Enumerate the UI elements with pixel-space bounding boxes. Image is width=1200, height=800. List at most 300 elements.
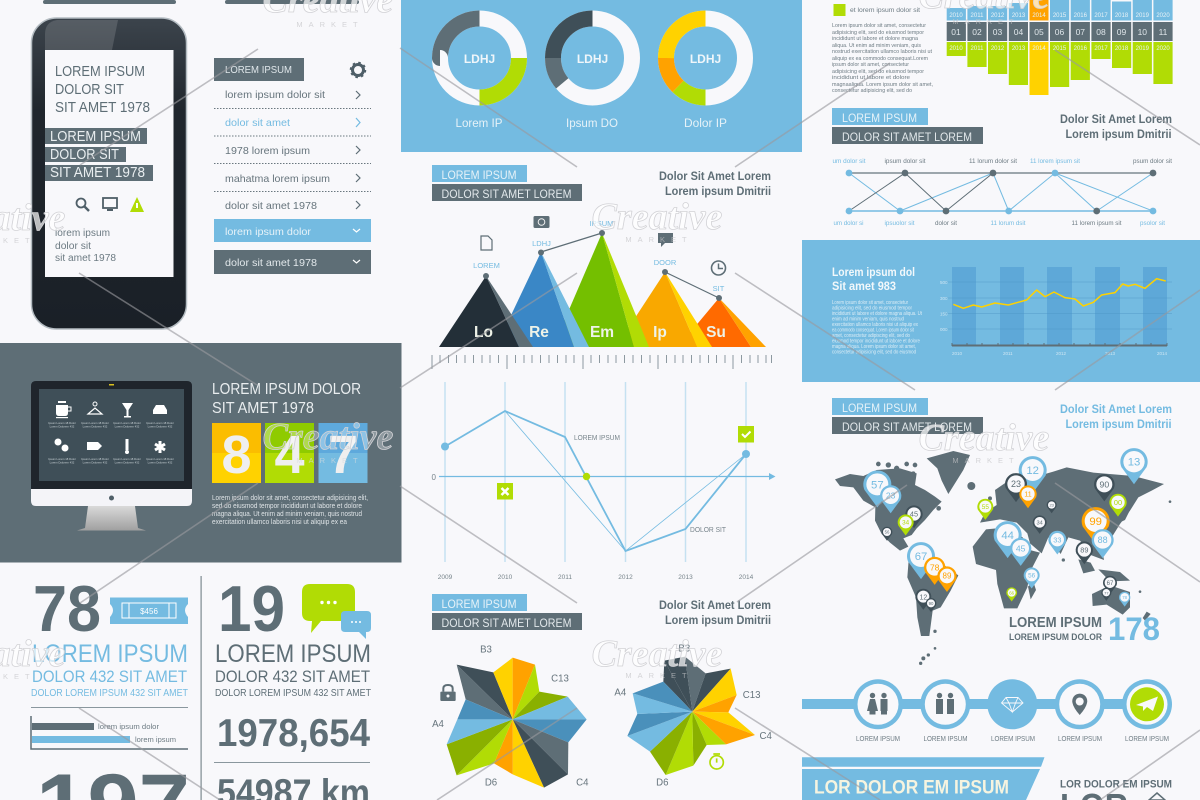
pin 56 (882, 527, 892, 541)
column table chart: 2015 (1053, 13, 1067, 19)
donut 1: LDHJ (464, 52, 495, 66)
pin 77 (1101, 588, 1111, 601)
mountain chart: Ip (653, 324, 667, 341)
panel heading: LOREM IPSUM DOLOR (212, 381, 361, 398)
heading right: mountain chart: Lorem ipsum Dmitrii (665, 184, 771, 198)
pin 13 (1120, 448, 1148, 484)
mountain chart: IPSUM (590, 219, 613, 228)
number tiles (212, 423, 368, 485)
star chart right: C13 (743, 690, 761, 701)
column table chart: 2012 (991, 46, 1005, 52)
icon: speech bubbles (302, 584, 371, 639)
panel paragraph (212, 495, 368, 526)
phone mockup: SIT AMET 1978 (50, 165, 145, 181)
watermark text: MARKET (625, 235, 693, 244)
mountain chart: Lo (474, 324, 493, 341)
panel: blue area chart: ea commodo consequat. Lorem ipsum dolor sit (832, 328, 914, 334)
panel: monitor (0, 343, 402, 562)
star chart right: B3 (678, 644, 690, 655)
column table chart: 2017 (1094, 13, 1108, 19)
monitor icons (54, 401, 167, 454)
star chart left: A4 (432, 719, 445, 730)
pin 33: 33 (1053, 535, 1061, 544)
area chart: 500 (940, 280, 948, 285)
legend and paragraph: adipisicing elit, sed do eiusmod tempor (832, 30, 924, 36)
monitor: Ipsum Lorem 18 Dolor (113, 457, 141, 461)
timeline labels: LOREM IPSUM (991, 736, 1035, 743)
column table chart: 2019 (1136, 13, 1150, 19)
line chart: 2010 (498, 574, 513, 581)
column table chart: 2020 (1156, 13, 1170, 19)
column table chart: 02 (972, 27, 982, 37)
watermark text: MARKET (952, 17, 1020, 26)
donut 1 (440, 18, 519, 98)
icon: diamond (1002, 698, 1023, 712)
panel paragraph: sed do eiusmod tempor incididunt ut labore et dolore (212, 503, 362, 510)
panel: blue area chart: Lorem ipsum dolor sit amet, consectetur (832, 300, 908, 306)
monitor: Ipsum Lorem 18 Dolor (113, 421, 141, 425)
network diagram: psolor sit (1140, 221, 1165, 227)
line chart: DOLOR SIT (690, 525, 726, 534)
pin 55 (977, 499, 993, 520)
mountain chart: Em (590, 324, 614, 341)
stats right column (200, 572, 371, 800)
star chart right: A4 (614, 688, 627, 699)
pin 44 (994, 521, 1022, 558)
heading right: star charts (659, 598, 771, 627)
pin 34 (1033, 515, 1047, 534)
pin 23 (880, 485, 901, 513)
column table chart: 05 (1034, 27, 1044, 37)
menu list: lorem ipsum dolor sit (225, 89, 325, 101)
panel: blue area chart: eiusmod tempor incididunt ut labore et dolore (832, 338, 920, 344)
column table chart: 03 (993, 27, 1002, 37)
heading right: network (1060, 112, 1172, 141)
column table chart: 11 (1159, 27, 1168, 37)
monitor: Lorem Dolorem 432 (148, 424, 173, 428)
icon: cross box (497, 483, 513, 500)
pin 67: 67 (1107, 581, 1114, 587)
pin 78 (1119, 592, 1130, 607)
star chart right: D6 (656, 778, 669, 789)
icon: paper plane (1136, 696, 1158, 711)
column table chart: 2010 (949, 13, 963, 19)
pin 33 (1048, 531, 1066, 555)
mountain chart: LDHJ (532, 239, 551, 248)
pin 56: 56 (1028, 573, 1036, 580)
area chart (940, 267, 1172, 356)
monitor (31, 381, 192, 530)
number tiles: 8 (221, 425, 252, 485)
pin 90: 90 (929, 601, 934, 606)
stats left column: 78 (33, 572, 101, 645)
panel: blue area chart: adipisicing elit, sed do eiusmod tempor (832, 306, 912, 312)
heading right: star charts: Lorem ipsum Dmitrii (665, 613, 771, 627)
legend and paragraph: incididunt ut labore et dolore magna (832, 36, 919, 42)
pin 90 (1094, 474, 1115, 501)
pin 12 (915, 589, 931, 610)
area chart: 2011 (1003, 351, 1013, 356)
icons: document, camera, speech, clock (481, 216, 726, 275)
column table chart: 2014 (1032, 13, 1046, 19)
pin 11: 11 (1024, 492, 1032, 499)
menu list: 1978 lorem ipsum (225, 145, 310, 157)
heading tags: star charts: DOLOR SIT AMET LOREM (442, 618, 572, 630)
mountain chart: SIT (713, 284, 725, 293)
star chart left: D6 (485, 778, 497, 789)
heading right: network: Dolor Sit Amet Lorem (1060, 112, 1172, 126)
panel paragraph: exercitation ullamco laboris nisi ut aliquip ex ea (212, 519, 347, 526)
monitor: Lorem Dolorem 432 (83, 424, 108, 428)
star chart right (614, 644, 772, 789)
column table chart: 09 (1117, 27, 1126, 37)
watermark text: MARKET (296, 456, 364, 465)
star chart left: B3 (480, 644, 492, 655)
watermark text: MARKET (296, 20, 364, 29)
icon: couple (867, 693, 888, 714)
column table chart: 2018 (1115, 46, 1129, 52)
column table chart: 06 (1055, 27, 1064, 37)
icon: two men (936, 693, 954, 714)
network diagram: 11 lorum dsit (990, 221, 1026, 227)
phone mockup: sit amet 1978 (55, 253, 116, 264)
stats left column (31, 572, 190, 800)
area chart: 2013 (1105, 351, 1116, 356)
panel: blue area chart: incididunt ut labore et dolore magna aliqua. Ut (832, 311, 923, 317)
phone mockup: DOLOR SIT (50, 147, 119, 163)
monitor: Ipsum Lorem 18 Dolor (81, 421, 109, 425)
stats left column: LOREM IPSUM (32, 640, 188, 668)
line chart: 2009 (438, 574, 453, 581)
heading right: map: Dolor Sit Amet Lorem (1060, 402, 1172, 416)
watermark text (0, 0, 1050, 681)
mountain chart: Re (529, 324, 549, 341)
map stats: LOREM IPSUM (1009, 615, 1102, 631)
network diagram (832, 159, 1172, 227)
pin 45: 45 (910, 510, 918, 519)
icon: ticket: $456 (140, 607, 158, 616)
heading tags: network: DOLOR SIT AMET LOREM (842, 132, 972, 144)
panel heading: SIT AMET 1978 (212, 400, 314, 417)
pin 99: 99 (1089, 516, 1102, 528)
column table chart (947, 0, 1173, 95)
mountain chart: LOREM (473, 261, 500, 270)
donut labels: Lorem IP (456, 118, 503, 130)
world map (835, 448, 1171, 665)
panel: blue area chart: consectetur adipisicing elit, sed do eiusmod (832, 350, 916, 356)
donut 3 (666, 18, 745, 98)
column table chart: 01 (951, 27, 961, 37)
watermark text: MARKET (952, 456, 1020, 465)
monitor: Ipsum Lorem 18 Dolor (81, 457, 109, 461)
heading tags: map: DOLOR SIT AMET LOREM (842, 422, 972, 434)
pin 44: 44 (1001, 530, 1014, 542)
panel: blue area chart: exercitation ullamco laboris nisi ut aliquip ex (832, 322, 918, 328)
pin 88 (1092, 529, 1114, 558)
timeline labels: LOREM IPSUM (856, 736, 900, 743)
icon: lock (440, 685, 456, 701)
network diagram: 11 lorem ipsum sit (1030, 159, 1080, 165)
monitor: Lorem Dolorem 432 (115, 424, 140, 428)
heading tags: mountain chart: LOREM IPSUM (442, 170, 516, 182)
legend and paragraph: ipsum dolor sit amet, consectetur (832, 62, 909, 68)
cropped phone bases at top edge (43, 0, 359, 4)
line chart (432, 382, 776, 581)
column table chart: 2019 (1136, 46, 1150, 52)
donut labels: Ipsum DO (566, 118, 618, 130)
monitor: Lorem Dolorem 432 (148, 460, 173, 464)
bottom right heading: LOR DOLOR EM IPSUM (1060, 778, 1172, 790)
monitor: Lorem Dolorem 432 (115, 460, 140, 464)
timeline labels (856, 736, 1169, 743)
phone mockup: lorem ipsum (55, 228, 110, 239)
stats right column: DOLOR LOREM IPSUM 432 SIT AMET (215, 688, 371, 699)
pin 67 (1103, 576, 1117, 594)
heading tags: network (832, 108, 983, 144)
network diagram: ipsuolor sit (884, 221, 915, 227)
heading right: star charts: Dolor Sit Amet Lorem (659, 598, 771, 612)
map stats (1009, 611, 1160, 647)
legend and paragraph: consectetur adipisicing elit, sed do (832, 88, 912, 94)
mini bar chart: lorem ipsum dolor (98, 722, 160, 731)
column table chart: 2013 (1012, 13, 1026, 19)
pin 55: 55 (982, 504, 989, 511)
map pins (863, 448, 1148, 612)
heading tags: mountain chart: DOLOR SIT AMET LOREM (442, 189, 572, 201)
donut labels: Dolor IP (684, 118, 727, 130)
column table chart: 2014 (1032, 46, 1046, 52)
menu list: dolor sit amet 1978 (225, 257, 317, 269)
column table chart: 07 (1076, 27, 1085, 37)
pin 66 (1006, 587, 1017, 601)
panel: donut charts (401, 0, 802, 152)
legend and paragraph: aliqua. Ut enim ad minim veniam, quis (832, 43, 921, 49)
icon: check box (738, 426, 754, 442)
legend and paragraph: nostrud exercitation ullamco laboris nisi ut (832, 49, 932, 55)
area chart: 2010 (952, 351, 963, 356)
pin 57: 57 (871, 479, 884, 491)
column table chart: 2012 (991, 13, 1005, 19)
pin 78: 78 (930, 562, 940, 572)
pin 23 (1005, 473, 1027, 502)
pin 56: 56 (885, 530, 890, 535)
column table chart: 2018 (1115, 13, 1129, 19)
line chart: 2013 (678, 574, 693, 581)
pin 67: 67 (915, 551, 927, 563)
map stats: LOREM IPSUM DOLOR (1009, 632, 1102, 643)
monitor: Ipsum Lorem 18 Dolor (48, 457, 76, 461)
menu list: dolor sit amet 1978 (225, 200, 317, 212)
pin 77: 77 (1104, 590, 1109, 595)
pin 90 (926, 598, 936, 612)
panel: blue area chart (802, 240, 1200, 382)
pin 12 (1019, 456, 1047, 493)
phone mockup: dolor sit (55, 241, 91, 252)
pin 89: 89 (1080, 546, 1088, 555)
network diagram: ipsum dolor sit (884, 159, 926, 165)
phone mockup: LOREM IPSUM (50, 129, 141, 145)
menu list: lorem ipsum dolor (225, 226, 312, 238)
star chart left: C4 (576, 778, 589, 789)
menu list: LOREM IPSUM (225, 64, 292, 76)
panel: blue area chart: amet, consectetur adipiscing elit, sed do (832, 333, 910, 339)
pin 45 (905, 505, 923, 528)
panel: blue area chart: Lorem ipsum dol (832, 265, 915, 279)
pin 23 (1047, 500, 1057, 513)
line chart: 0 (432, 473, 436, 482)
heading tags: map (832, 398, 983, 434)
heading tags: star charts (432, 594, 582, 630)
legend and paragraph: incididunt ut labore et dolore (832, 75, 910, 81)
column table chart: 2010 (949, 46, 963, 52)
column table chart: 2011 (971, 46, 984, 52)
panel: blue area chart: magna aliqua. Lorem ipsum dolor sit amet, (832, 344, 916, 350)
pin 45 (1010, 538, 1031, 566)
phone icons: search, monitor, warning (76, 197, 144, 212)
number tiles: 7 (328, 425, 358, 485)
pin 12: 12 (919, 594, 927, 601)
pin 89 (937, 566, 957, 592)
watermark text: Creative (592, 633, 723, 675)
heading right: mountain chart (659, 169, 771, 198)
star chart right: C4 (759, 731, 772, 742)
panel: blue area chart: Sit amet 983 (832, 279, 896, 293)
column table chart: 08 (1096, 27, 1106, 37)
monitor: Ipsum Lorem 18 Dolor (146, 457, 174, 461)
pin 90: 90 (1100, 479, 1109, 489)
column table chart: 2011 (971, 13, 984, 19)
heading right: network: Lorem ipsum Dmitrii (1066, 127, 1172, 141)
watermark text: Creative (592, 196, 723, 238)
column table chart: 2016 (1074, 46, 1088, 52)
legend and paragraph: et lorem ipsum dolor sit (850, 7, 920, 14)
phone mockup: SIT AMET 1978 (55, 100, 150, 116)
pin 56 (1024, 567, 1040, 589)
panel paragraph: magna aliqua. Ut enim ad minim veniam, quis nostrud (212, 511, 362, 518)
timeline labels: LOREM IPSUM (924, 736, 968, 743)
heading tags: network: LOREM IPSUM (842, 113, 917, 125)
line chart: 2012 (618, 574, 633, 581)
heading right: map (1060, 402, 1172, 431)
pin 23: 23 (886, 491, 896, 501)
panel heading (212, 381, 361, 417)
stats right column: 19 (218, 572, 285, 645)
heading tags: star charts: LOREM IPSUM (442, 599, 516, 611)
stats left column: DOLOR 432 SIT AMET (32, 668, 187, 686)
pin 89: 89 (943, 572, 952, 581)
donut 2 (553, 18, 632, 98)
panel paragraph: Lorem ipsum dolor sit amet, consectetur adipisicing elit, (212, 495, 368, 502)
bottom banner (802, 757, 1044, 800)
legend and paragraph: Lorem ipsum dolor sit amet, consectetur (832, 23, 926, 29)
heading tags: mountain chart (432, 165, 582, 201)
pin 34: 34 (902, 520, 910, 527)
legend and paragraph: magnaaliqua. Lorem ipsum dolor sit amet, (832, 82, 933, 88)
star chart left (432, 644, 589, 789)
watermark text: Creative (263, 416, 394, 458)
phone mockup (32, 18, 186, 329)
heading tags: map: LOREM IPSUM (842, 403, 917, 415)
column table chart: 04 (1014, 27, 1023, 37)
pin 78 (924, 557, 945, 585)
monitor: Ipsum Lorem 18 Dolor (146, 421, 174, 425)
mountain chart: DOOR (654, 258, 677, 267)
icon: location pin (1072, 694, 1087, 715)
pin 34 (898, 514, 914, 536)
watermark text: MARKET (625, 671, 693, 680)
legend and paragraph (832, 4, 933, 94)
column table chart: 2015 (1053, 46, 1067, 52)
pin 89 (1076, 541, 1093, 564)
timeline icons (802, 679, 1172, 743)
pin 23: 23 (1011, 479, 1021, 489)
stats left column: DOLOR LOREM IPSUM 432 SIT AMET (31, 688, 188, 699)
pin 99 (1082, 507, 1110, 544)
pin 57 (863, 470, 891, 507)
menu list (214, 58, 371, 274)
area chart: 2014 (1157, 351, 1168, 356)
donut labels (456, 118, 727, 130)
area chart: 000 (940, 327, 948, 332)
pin 11 (1019, 485, 1037, 508)
bottom right heading (1060, 778, 1172, 800)
stats right column: 1978,654 (217, 712, 370, 755)
network diagram: psum dolor sit (1133, 159, 1172, 165)
monitor: Lorem Dolorem 432 (50, 424, 75, 428)
pin 45: 45 (1016, 543, 1026, 553)
donut 2: LDHJ (577, 52, 608, 66)
stats right column: LOREM IPSUM (215, 640, 371, 668)
star chart left: C13 (551, 673, 569, 684)
line chart: 2011 (558, 574, 572, 581)
pin 66: 66 (1009, 590, 1015, 595)
pin 00 (1109, 494, 1127, 517)
monitor: Lorem Dolorem 432 (83, 460, 108, 464)
heading right: mountain chart: Dolor Sit Amet Lorem (659, 169, 771, 183)
phone mockup: LOREM IPSUM (55, 64, 145, 80)
menu list: mahatma lorem ipsum (225, 173, 330, 185)
donut 3: LDHJ (690, 52, 721, 66)
pin 67 (907, 542, 935, 579)
bottom banner: LOR DOLOR EM IPSUM (814, 778, 1009, 798)
area chart: 300 (940, 296, 948, 301)
pin 88: 88 (1098, 535, 1108, 545)
area chart: 2012 (1056, 351, 1067, 356)
watermark text: Creative (919, 417, 1050, 459)
timeline labels: LOREM IPSUM (1125, 736, 1169, 743)
mountain chart (439, 216, 766, 347)
number tiles: 4 (274, 425, 305, 485)
column table chart: 2013 (1012, 46, 1026, 52)
panel: blue area chart: enim ad minim veniam, quis nostrud (832, 316, 904, 322)
pin 34: 34 (1037, 520, 1043, 526)
menu list: dolor sit amet (225, 117, 290, 129)
column table chart: 2017 (1094, 46, 1108, 52)
column table chart: 2016 (1074, 13, 1088, 19)
monitor: Ipsum Lorem 18 Dolor (48, 421, 76, 425)
map stats: 178 (1108, 611, 1160, 647)
pin 00: 00 (1114, 498, 1122, 507)
mountain chart: Su (706, 324, 726, 341)
pin 13: 13 (1128, 457, 1140, 469)
pin 78: 78 (1122, 595, 1128, 600)
stats right column: DOLOR 432 SIT AMET (215, 668, 370, 686)
ruler (432, 355, 772, 369)
icon: ticket (110, 598, 188, 624)
network diagram: dolor sit (935, 221, 957, 227)
mini bar chart (31, 716, 188, 749)
legend and paragraph: adipisicing elit, sed do eiusmod tempor (832, 69, 924, 75)
